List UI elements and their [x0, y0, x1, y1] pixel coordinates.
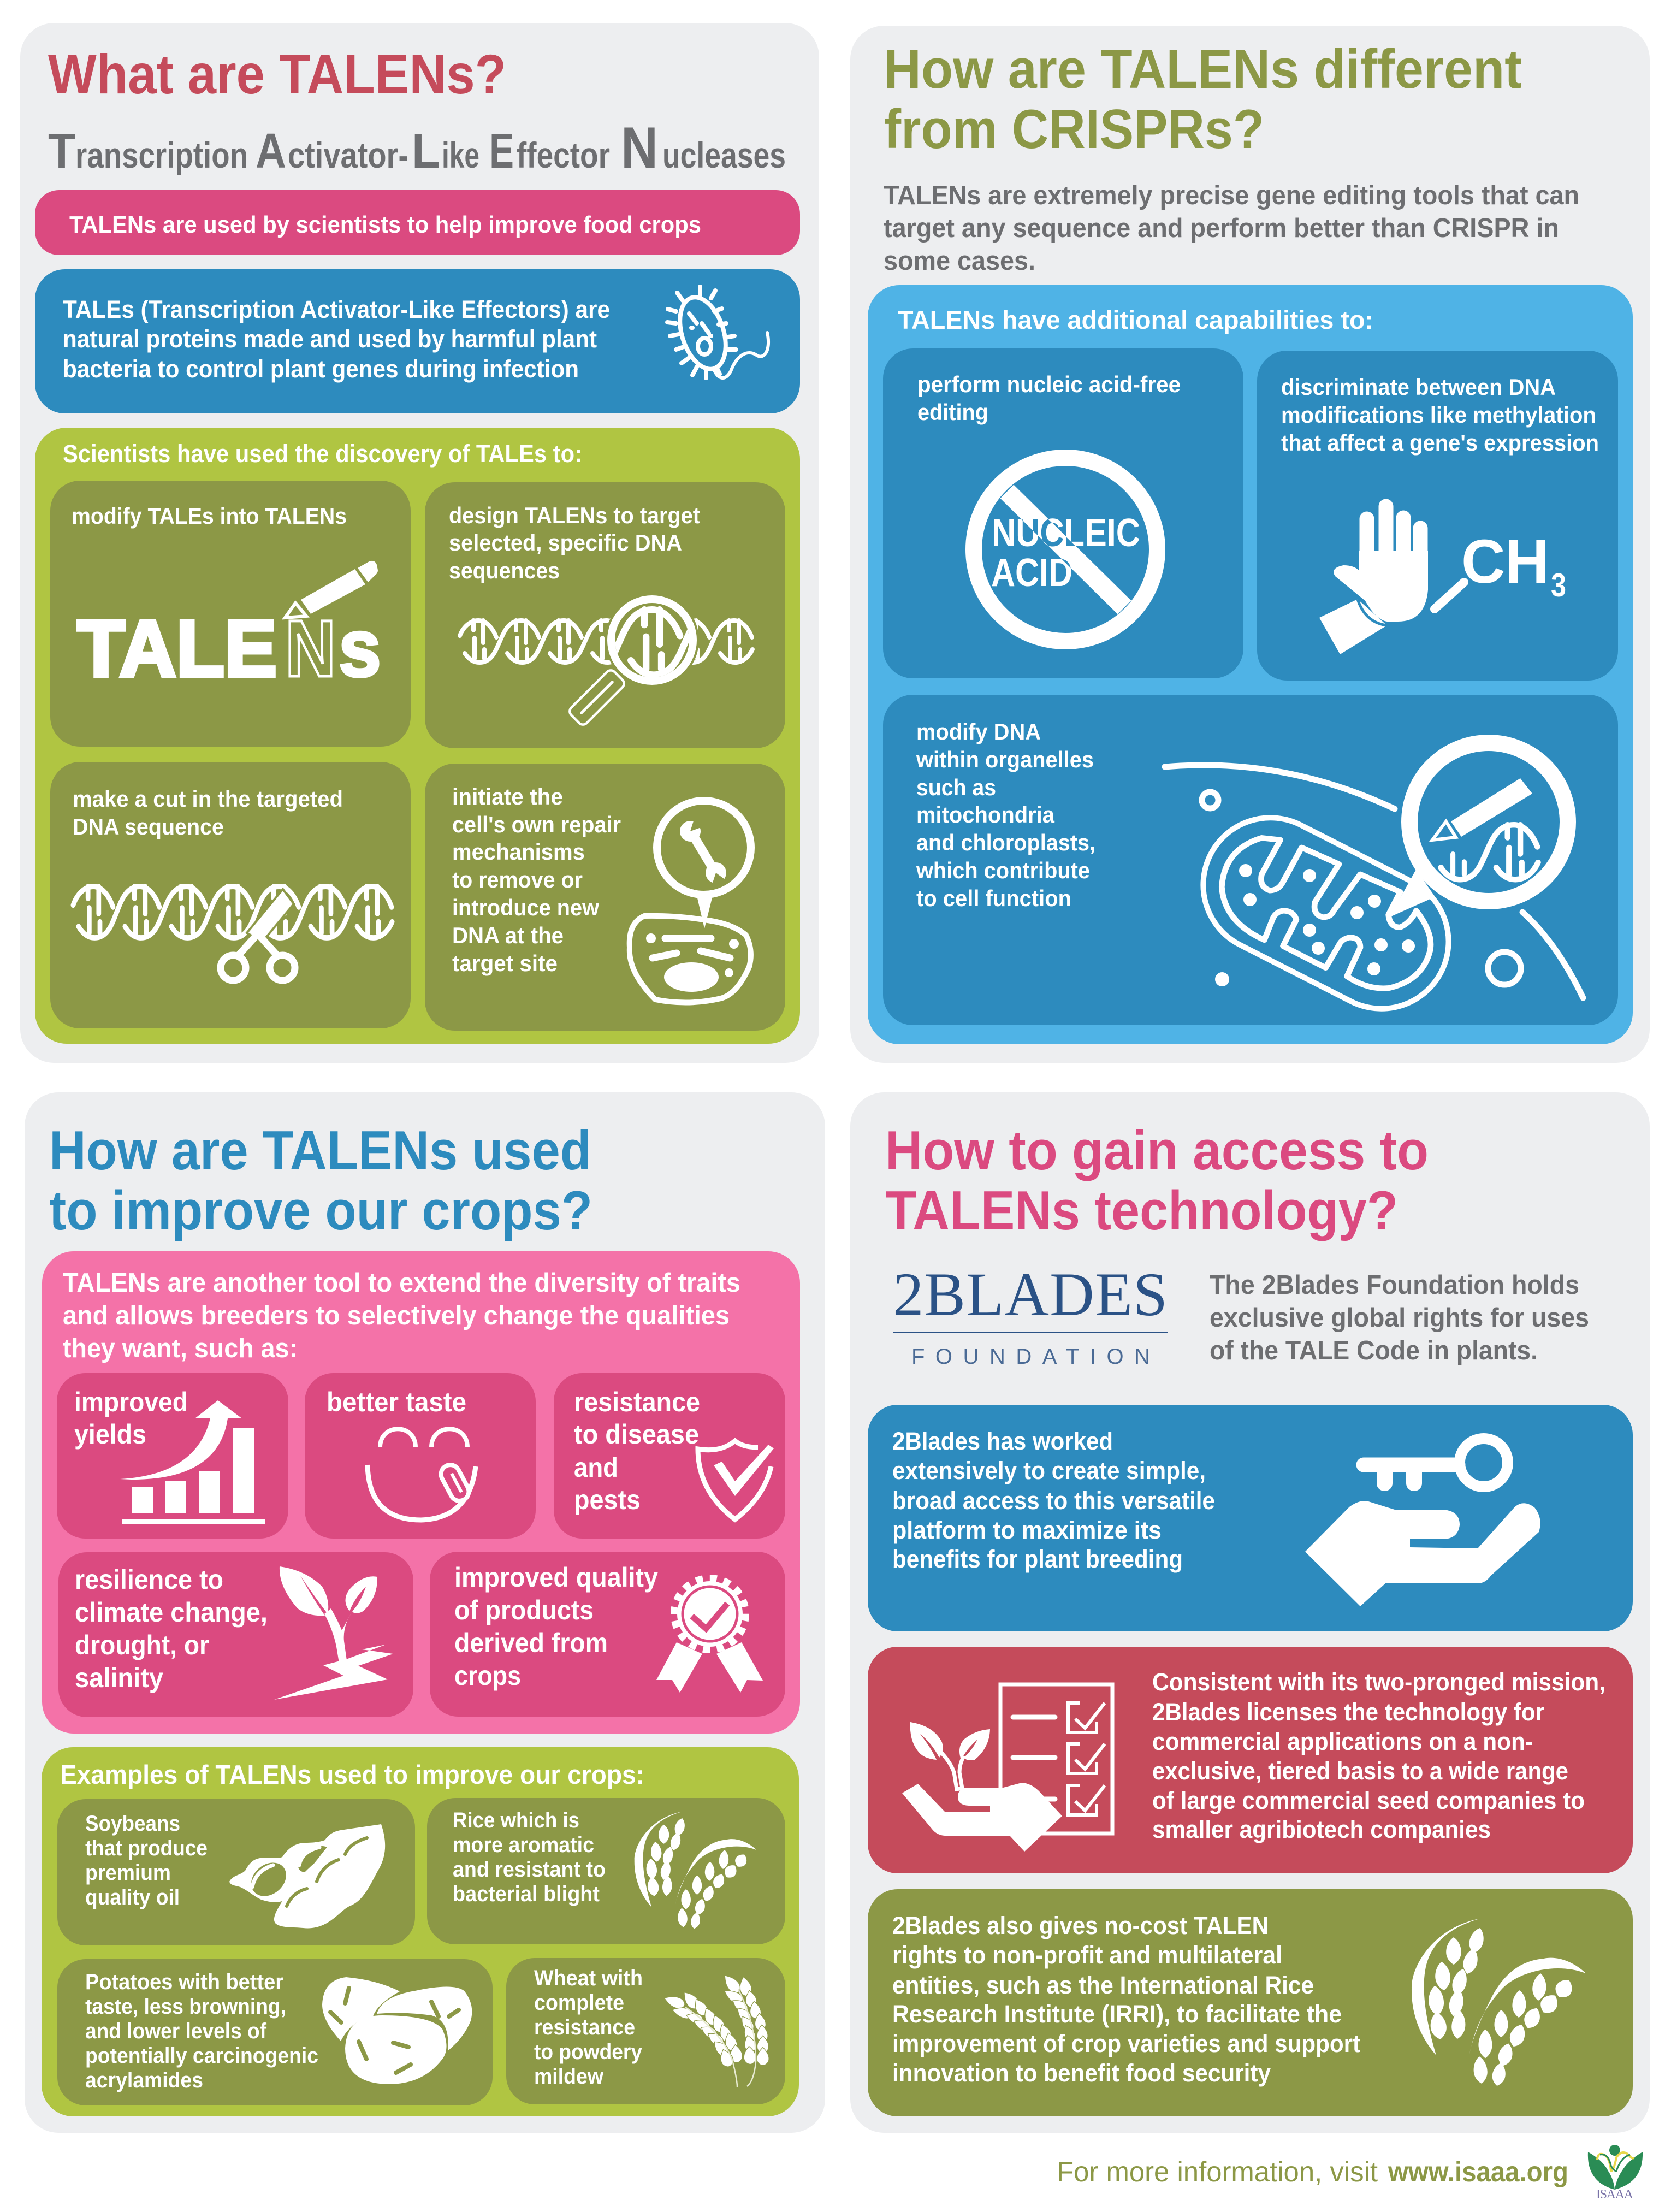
card: resilience: resilience to — [75, 1564, 223, 1595]
icon: plant in hand with checklist — [902, 1684, 1112, 1852]
card: nucleic acid-free editing: editing — [917, 399, 988, 425]
card: modify organelle DNA — [883, 695, 1618, 1032]
card: make a cut: DNA sequence — [73, 814, 224, 839]
heading: gain access — [885, 1120, 1429, 1241]
card: discriminate modifications: modifications like methylation — [1281, 402, 1596, 428]
card: modify organelle DNA: such as — [916, 774, 996, 800]
card: discriminate modifications: that affect a gene's expression — [1281, 430, 1599, 456]
card: improved quality: of products — [454, 1595, 594, 1625]
card: soybeans: premium — [85, 1861, 171, 1885]
panel: how different from CRISPRs — [850, 26, 1650, 1063]
subtitle: acronym: ffector — [517, 135, 610, 175]
icon: soybean pod — [229, 1824, 385, 1928]
panel: how TALENs improve crops — [25, 1092, 825, 2133]
icon: rice stalks large — [1412, 1919, 1586, 2087]
card: rice: and resistant to — [453, 1858, 606, 1882]
card: design TALENs: sequences — [449, 558, 560, 583]
card: potatoes: acrylamides — [85, 2068, 203, 2092]
card: improved yields — [57, 1373, 288, 1539]
heading: improve our crops: How are TALENs used — [49, 1120, 591, 1181]
card: design TALENs: design TALENs to target — [449, 502, 700, 528]
box: no-cost rights: innovation to benefit food security — [892, 2059, 1271, 2087]
text: precision intro: target any sequence and perform better than CRISPR in — [884, 214, 1559, 243]
card: discriminate modifications: discriminate between DNA — [1281, 374, 1556, 400]
box: commercial licensing: 2Blades licenses the technology for — [1152, 1698, 1544, 1726]
card: wheat: resistance — [534, 2015, 635, 2039]
card: soybeans: Soybeans — [85, 1812, 180, 1836]
card: modify organelle DNA: mitochondria — [916, 802, 1055, 827]
icon: award rosette — [656, 1578, 763, 1693]
logo: 2Blades Foundation — [893, 1261, 1168, 1369]
text: TALEs definition: natural proteins made and used by harmful plant — [63, 325, 597, 353]
card: resistance — [554, 1373, 785, 1539]
icon: hand and CH3: CH — [1461, 527, 1549, 596]
card: modify organelle DNA: which contribute — [916, 857, 1090, 883]
icon: potatoes — [322, 1977, 472, 2084]
card: potatoes: potentially carcinogenic — [85, 2044, 318, 2068]
card: initiate repair: mechanisms — [452, 839, 585, 865]
card: initiate repair: introduce new — [452, 895, 599, 920]
card: modify organelle DNA: to cell function — [916, 885, 1071, 911]
card: improved yields: yields — [74, 1419, 146, 1450]
icon: wheat ears — [662, 1972, 769, 2087]
card: rice — [427, 1798, 785, 1944]
subtitle: acronym: ucleases — [662, 135, 786, 175]
card: resistance: to disease — [574, 1419, 699, 1450]
text: precision intro: some cases. — [884, 246, 1035, 276]
icon: DNA with scissors — [73, 886, 392, 980]
card: initiate repair: target site — [452, 950, 558, 976]
icon: DNA with magnifier — [460, 593, 752, 727]
card: initiate repair: cell's own repair — [452, 812, 621, 837]
card: resistance: resistance — [574, 1387, 700, 1417]
heading: gain access: TALENs technology? — [885, 1180, 1398, 1241]
box: no-cost rights — [868, 1889, 1633, 2116]
text: TALEs definition — [63, 295, 610, 383]
card: wheat: to powdery — [534, 2040, 643, 2064]
card: rice: Rice which is — [453, 1808, 579, 1832]
card: potatoes — [57, 1959, 493, 2105]
card: improved quality: crops — [454, 1660, 521, 1691]
heading: gain access: How to gain access to — [885, 1120, 1429, 1181]
icon: TALENs wordmark and pencil: TALE — [77, 604, 277, 694]
card: wheat: complete — [534, 1991, 624, 2015]
box: commercial licensing: smaller agribiotech companies — [1152, 1815, 1491, 1843]
heading: improve our crops: to improve our crops? — [49, 1180, 592, 1241]
box: commercial licensing — [868, 1647, 1633, 1873]
card: wheat: mildew — [534, 2065, 604, 2089]
footer: more information: www.isaaa.org — [1388, 2156, 1568, 2188]
card: improved quality: derived from — [454, 1628, 608, 1658]
card: resistance: pests — [574, 1484, 641, 1515]
box: broad access: benefits for plant breeding — [892, 1545, 1183, 1573]
card: soybeans — [57, 1799, 415, 1945]
card: improved yields: improved — [74, 1387, 188, 1417]
text: exclusive rights: The 2Blades Foundation holds — [1210, 1270, 1579, 1300]
card: wheat — [506, 1958, 785, 2104]
text: traits intro: and allows breeders to selectively change the qualities — [63, 1301, 730, 1330]
icon: no nucleic acid sign — [974, 458, 1157, 641]
card: nucleic acid-free editing — [883, 348, 1243, 678]
card: potatoes: and lower levels of — [85, 2019, 267, 2043]
card: resilience: drought, or — [75, 1630, 209, 1660]
subtitle: acronym: ranscription — [75, 135, 248, 175]
subtitle: acronym: T — [48, 124, 75, 179]
subtitle: acronym: L — [412, 124, 440, 179]
box: crop examples — [42, 1747, 799, 2116]
box: broad access: platform to maximize its — [892, 1516, 1162, 1544]
text: precision intro: TALENs are extremely precise gene editing tools that can — [884, 181, 1579, 210]
box: commercial licensing: of large commercial seed companies to — [1152, 1787, 1585, 1814]
heading: scientists used TALEs: Scientists have used the discovery of TALEs to: — [63, 440, 582, 468]
card: potatoes: taste, less browning, — [85, 1995, 286, 2019]
footer: more information: For more information, visit — [1057, 2156, 1378, 2188]
icon: TALENs wordmark and pencil: N — [285, 604, 336, 694]
text: exclusive rights: of the TALE Code in plants. — [1210, 1336, 1538, 1365]
icon: hand and CH3 — [1319, 506, 1566, 654]
card: improved quality: improved quality — [454, 1562, 658, 1593]
card: nucleic acid-free editing: perform nucleic acid-free — [917, 371, 1181, 397]
card: design TALENs — [425, 482, 785, 748]
icon: rising bar chart — [120, 1400, 265, 1524]
icon: mitochondrion with DNA editing balloon — [1165, 743, 1583, 1032]
box: scientists used TALEs — [35, 428, 800, 1044]
text: TALEs definition: bacteria to control plant genes during infection — [63, 355, 579, 383]
icon: seedling on cracked ground — [274, 1566, 393, 1700]
card: soybeans: that produce — [85, 1836, 208, 1860]
card: make a cut — [50, 762, 411, 1028]
text: exclusive rights — [1210, 1270, 1589, 1365]
card: resistance: and — [574, 1452, 618, 1483]
card: design TALENs: selected, specific DNA — [449, 530, 682, 555]
box: commercial licensing: commercial applications on a non- — [1152, 1728, 1533, 1755]
card: resilience — [58, 1552, 413, 1717]
subtitle: acronym — [48, 115, 786, 180]
card: improved quality — [430, 1552, 785, 1717]
card: rice: bacterial blight — [453, 1882, 600, 1906]
icon: rice stalks — [635, 1812, 756, 1930]
icon: TALENs wordmark and pencil — [77, 561, 381, 694]
footer: more information — [1057, 2156, 1568, 2188]
banner: food crops: TALENs are used by scientists to help improve food crops — [69, 211, 701, 238]
card: modify TALEs into TALENs — [50, 481, 411, 747]
icon: hand and CH3: 3 — [1551, 567, 1566, 604]
text: traits intro: TALENs are another tool to extend the diversity of traits — [63, 1268, 740, 1298]
icon: bacterium — [667, 287, 768, 378]
box: no-cost rights: rights to non-profit and multilateral — [892, 1941, 1282, 1969]
subtitle: acronym: A — [256, 124, 286, 179]
box: no-cost rights: 2Blades also gives no-cost TALEN — [892, 1912, 1269, 1939]
subtitle: acronym: E — [489, 124, 514, 179]
title: What are TALENs? — [48, 43, 506, 105]
card: potatoes: Potatoes with better — [85, 1970, 283, 1994]
card: initiate repair: initiate the — [452, 784, 563, 809]
text: traits intro: they want, such as: — [63, 1334, 298, 1363]
card: better taste — [305, 1373, 536, 1539]
box: no-cost rights: Research Institute (IRRI), to facilitate the — [892, 2000, 1342, 2028]
box: traits — [42, 1251, 800, 1734]
card: modify organelle DNA: within organelles — [916, 747, 1094, 772]
logo: 2Blades Foundation: FOUNDATION — [911, 1345, 1150, 1369]
card: initiate repair: DNA at the — [452, 922, 564, 948]
text: TALEs definition: TALEs (Transcription Activator-Like Effectors) are — [63, 295, 610, 323]
box: broad access: 2Blades has worked — [892, 1427, 1113, 1455]
card: better taste: better taste — [327, 1387, 466, 1417]
logo: ISAAA — [1588, 2145, 1643, 2202]
icon: smiling face — [368, 1429, 476, 1520]
box: commercial licensing: exclusive, tiered basis to a wide range — [1152, 1757, 1568, 1785]
box: TALEs definition — [35, 269, 800, 413]
card: modify TALEs into TALENs: modify TALEs into TALENs — [72, 503, 347, 529]
card: initiate repair: to remove or — [452, 867, 583, 892]
panel: gain access — [850, 1092, 1650, 2133]
card: discriminate modifications — [1257, 351, 1618, 681]
card: modify organelle DNA: modify DNA — [916, 719, 1041, 744]
card: initiate repair — [425, 764, 785, 1031]
card: resilience: salinity — [75, 1663, 163, 1693]
banner: food crops — [35, 190, 800, 255]
icon: wrench balloon and plant cell — [630, 801, 751, 1003]
card: make a cut: make a cut in the targeted — [73, 786, 343, 812]
card: soybeans: quality oil — [85, 1885, 180, 1909]
card: wheat: Wheat with — [534, 1966, 643, 1990]
box: no-cost rights: entities, such as the International Rice — [892, 1971, 1314, 1999]
logo: 2Blades Foundation: 2BLADES — [893, 1261, 1168, 1329]
heading: additional capabilities: TALENs have additional capabilities to: — [898, 305, 1373, 334]
box: broad access: extensively to create simple, — [892, 1457, 1206, 1484]
icon: shield with check — [698, 1441, 774, 1519]
subtitle: acronym: N — [621, 115, 658, 180]
card: rice: more aromatic — [453, 1833, 594, 1857]
heading: different from CRISPRs: from CRISPRs? — [884, 99, 1264, 160]
heading: crop examples: Examples of TALENs used to improve our crops: — [60, 1760, 644, 1790]
box: broad access: broad access to this versatile — [892, 1487, 1215, 1515]
heading: improve our crops — [49, 1120, 592, 1241]
icon: hand and key — [1305, 1439, 1540, 1606]
heading: different from CRISPRs — [884, 39, 1522, 160]
subtitle: acronym: ike — [442, 135, 479, 175]
subtitle: acronym: ctivator- — [288, 135, 408, 175]
icon: no nucleic acid sign: NUCLEIC — [992, 511, 1140, 555]
box: additional capabilities — [868, 285, 1633, 1044]
icon: no nucleic acid sign: ACID — [991, 551, 1072, 595]
logo: ISAAA: ISAAA — [1596, 2187, 1634, 2202]
box: no-cost rights: improvement of crop varieties and support — [892, 2030, 1360, 2057]
text: traits intro — [63, 1268, 740, 1363]
text: precision intro — [884, 181, 1579, 276]
icon: TALENs wordmark and pencil: s — [339, 602, 381, 694]
heading: different from CRISPRs: How are TALENs different — [884, 39, 1522, 100]
box: broad access — [868, 1405, 1633, 1631]
card: modify organelle DNA: and chloroplasts, — [916, 830, 1095, 855]
box: commercial licensing: Consistent with its two-pronged mission, — [1152, 1668, 1605, 1696]
text: exclusive rights: exclusive global rights for uses — [1210, 1303, 1589, 1333]
panel: what are TALENs — [20, 23, 819, 1063]
card: resilience: climate change, — [75, 1597, 268, 1628]
